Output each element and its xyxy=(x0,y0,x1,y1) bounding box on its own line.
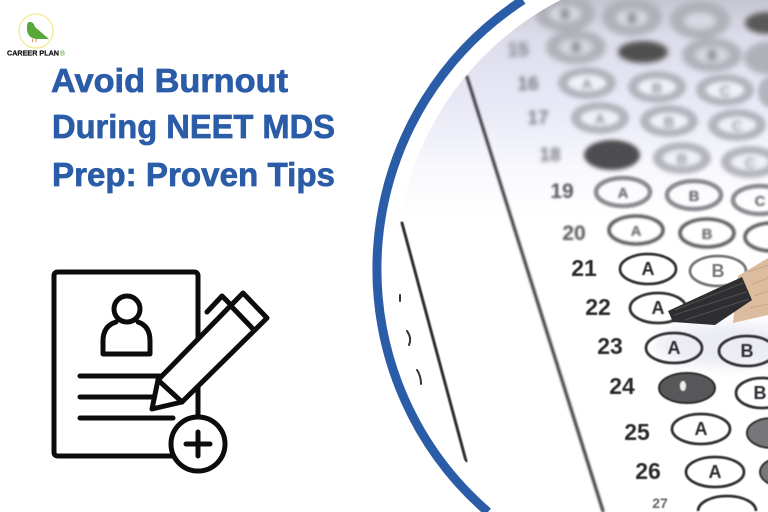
rows 16-18, blurred: C xyxy=(745,155,756,172)
rows 14-15, heavily blurred: 15 xyxy=(507,40,529,61)
rows 16-18, blurred: 17 xyxy=(527,108,549,129)
pencil xyxy=(668,258,768,325)
title: Prep: Proven Tips xyxy=(52,156,335,193)
rows 19-20, slightly blurred: 20 xyxy=(562,222,586,245)
photo: answer sheet with bubbles and pencil xyxy=(380,0,768,512)
rows 19-20, slightly blurred xyxy=(550,178,768,251)
rows 16-18, blurred xyxy=(517,67,768,178)
title: During NEET MDS xyxy=(52,108,335,145)
rows 21-27, sharp: B xyxy=(740,341,754,361)
rows 19-20, slightly blurred: 19 xyxy=(550,180,574,203)
rows 16-18, blurred: C xyxy=(732,118,743,135)
shading behind lower rows xyxy=(655,323,768,367)
rows 21-27, sharp: 27 xyxy=(652,495,668,511)
rows 16-18, blurred: 16 xyxy=(517,74,539,95)
rows 21-27, sharp: 21 xyxy=(571,255,597,281)
rows 21-27, sharp: A xyxy=(642,259,654,279)
rows 16-18, blurred: B xyxy=(652,80,663,97)
rows 19-20, slightly blurred: B xyxy=(689,188,700,205)
logo: Career Plan B: B xyxy=(60,50,65,58)
title: Avoid Burnout xyxy=(51,62,288,99)
sheet lines xyxy=(400,77,603,511)
rows 19-20, slightly blurred: A xyxy=(631,223,642,240)
rows 14-15, heavily blurred xyxy=(507,0,768,75)
rows 16-18, blurred: A xyxy=(595,111,606,128)
rows 21-27, sharp: 22 xyxy=(585,294,611,320)
icon: document with person, pen and plus xyxy=(54,272,267,471)
rows 21-27, sharp: B xyxy=(754,383,766,403)
rows 21-27, sharp: 24 xyxy=(609,373,635,399)
rows 16-18, blurred: B xyxy=(664,114,675,131)
rows 21-27, sharp xyxy=(571,254,768,511)
rows 21-27, sharp: A xyxy=(668,338,680,358)
rows 21-27, sharp: A xyxy=(652,298,664,318)
rows 21-27, sharp: A xyxy=(694,419,708,439)
rows 16-18, blurred: C xyxy=(720,83,731,100)
title xyxy=(51,62,335,193)
logo: Career Plan B: CAREER PLAN xyxy=(7,50,59,58)
rows 19-20, slightly blurred: A xyxy=(618,185,629,202)
rows 16-18, blurred: B xyxy=(677,151,688,168)
rows 16-18, blurred: A xyxy=(582,76,593,93)
rows 21-27, sharp: 25 xyxy=(624,419,650,445)
rows 21-27, sharp: 26 xyxy=(635,458,661,484)
rows 21-27, sharp: B xyxy=(712,261,724,281)
rows 19-20, slightly blurred: C xyxy=(755,193,766,210)
rows 16-18, blurred: 18 xyxy=(539,145,561,166)
rows 21-27, sharp: A xyxy=(708,462,722,482)
rows 21-27, sharp: 23 xyxy=(597,333,623,359)
rows 19-20, slightly blurred: B xyxy=(702,226,713,243)
logo: Career Plan B xyxy=(7,14,65,58)
decorative circle arc xyxy=(377,0,523,512)
